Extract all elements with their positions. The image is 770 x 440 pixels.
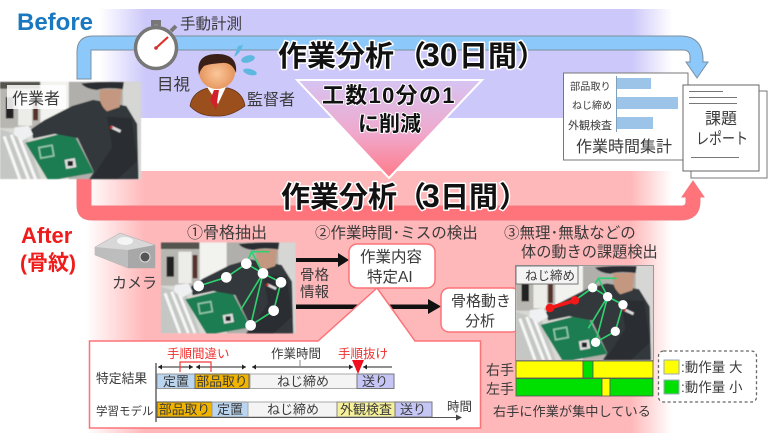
- labels: top of timeline: [167, 346, 388, 361]
- heading: after duration: 3: [422, 178, 440, 214]
- Before panel band: [100, 9, 672, 118]
- result row bars: 送り: [362, 374, 388, 389]
- model row bars: 外観検査: [340, 402, 392, 417]
- box: motion analysis: [441, 288, 520, 332]
- After panel band: [86, 171, 672, 433]
- heading: After: [20, 223, 76, 275]
- skeleton overlay: [193, 252, 286, 331]
- caption: right hand load: 右手に作業が集中している: [493, 404, 651, 419]
- step 1 heading: ①骨格抽出: [187, 224, 267, 242]
- skeleton overlay with red arm: [546, 278, 628, 347]
- label: worker: [7, 85, 66, 109]
- heading: before duration: 30: [422, 37, 458, 73]
- box: task identification AI: [349, 244, 435, 288]
- labels: hands: 右手: [486, 362, 514, 378]
- label: worker: 作業者: [12, 90, 60, 108]
- timing arrows: [158, 360, 392, 370]
- heading: after duration: 日間: [440, 182, 498, 214]
- heading: After: (骨紋): [20, 252, 76, 275]
- heading: after duration: 作業分析: [281, 181, 397, 214]
- label: manual timing: 手動計測: [180, 15, 242, 33]
- labels: top of timeline: 手順抜け: [338, 346, 388, 361]
- model row bars: 送り: [400, 402, 426, 417]
- label: model row: 学習モデル: [96, 404, 154, 418]
- photo: motion issue: [516, 266, 654, 362]
- model row bars: [157, 402, 432, 417]
- panel: work time chart: 作業時間集計: [576, 138, 672, 156]
- heading: before duration: （: [397, 41, 426, 73]
- icon: supervisor: [190, 45, 258, 116]
- step 3 heading: [504, 224, 658, 261]
- tag: screw tightening: ねじ締め: [525, 269, 575, 283]
- marker: missed step: [352, 360, 364, 374]
- heading: before duration: ）: [517, 41, 546, 73]
- step 3 heading: ③無理･無駄などの: [504, 224, 636, 242]
- result row bars: [157, 374, 394, 389]
- panel: work time chart: [564, 73, 688, 160]
- label: time: 時間: [447, 400, 472, 414]
- legend: [658, 351, 756, 402]
- icon: camera: [95, 233, 155, 268]
- label: skeleton info: [300, 267, 329, 301]
- label: skeleton info: 骨格: [300, 267, 329, 284]
- panel: timeline: [90, 244, 480, 428]
- arrow: before flow: [77, 36, 708, 79]
- label: skeleton info: 情報: [300, 284, 329, 301]
- result row bars: ねじ締め: [277, 374, 329, 389]
- result row bars: 部品取り: [196, 374, 248, 389]
- model row bars: 定置: [217, 402, 243, 417]
- heading: Before: Before: [17, 9, 93, 36]
- heading: After: After: [21, 223, 73, 248]
- icon: issue report: [683, 85, 767, 178]
- legend: :動作量 大: [681, 360, 743, 375]
- heading: before duration: 日間: [459, 41, 517, 73]
- model row bars: 部品取り: [159, 402, 210, 417]
- labels: top of timeline: 作業時間: [271, 346, 321, 361]
- label: visual check: 目視: [157, 75, 190, 94]
- label: supervisor: 監督者: [247, 91, 295, 109]
- icon: issue report: レポート: [696, 130, 748, 148]
- arrow: skeleton info: [296, 253, 349, 267]
- heading: after duration: （: [397, 182, 426, 214]
- arrow: after flow: [77, 178, 704, 220]
- box: motion analysis: 分析: [465, 313, 495, 330]
- step 2 heading: ②作業時間･ミスの検出: [315, 224, 478, 242]
- red bracket: order error: [180, 362, 211, 372]
- labels: hands: [486, 362, 514, 397]
- legend: :動作量 小: [681, 380, 743, 395]
- icon: issue report: 課題: [705, 111, 737, 128]
- reduction triangle: [297, 80, 482, 178]
- labels: top of timeline: 手順間違い: [167, 347, 230, 361]
- callout: man-hours reduced: [322, 83, 456, 136]
- panel: work time chart: 部品取り: [570, 81, 611, 93]
- box: task identification AI: 特定AI: [367, 268, 413, 286]
- motion bars: [516, 361, 653, 396]
- panel: work time chart: ねじ締め: [572, 99, 612, 112]
- box: motion analysis: 骨格動き: [451, 293, 511, 310]
- photo: worker: [0, 82, 141, 181]
- heading: after duration: ）: [499, 182, 528, 214]
- label: result row: 特定結果: [96, 371, 147, 386]
- box: task identification AI: 作業内容: [360, 248, 422, 266]
- icon: stopwatch: [136, 20, 176, 68]
- result row bars: 定置: [163, 374, 189, 389]
- heading: before duration: 作業分析: [278, 40, 394, 73]
- time axis: [156, 363, 462, 422]
- step 3 heading: 体の動きの課題検出: [521, 244, 658, 261]
- model row bars: ねじ締め: [267, 402, 319, 417]
- label: camera: カメラ: [112, 275, 157, 292]
- photo: skeleton extraction: [161, 242, 296, 335]
- labels: hands: 左手: [486, 381, 514, 397]
- panel: work time chart: 外観検査: [568, 118, 612, 132]
- callout: man-hours reduced: 工数10分の1: [322, 83, 456, 108]
- arrow: to motion analysis: [296, 299, 441, 314]
- callout: man-hours reduced: に削減: [358, 112, 421, 136]
